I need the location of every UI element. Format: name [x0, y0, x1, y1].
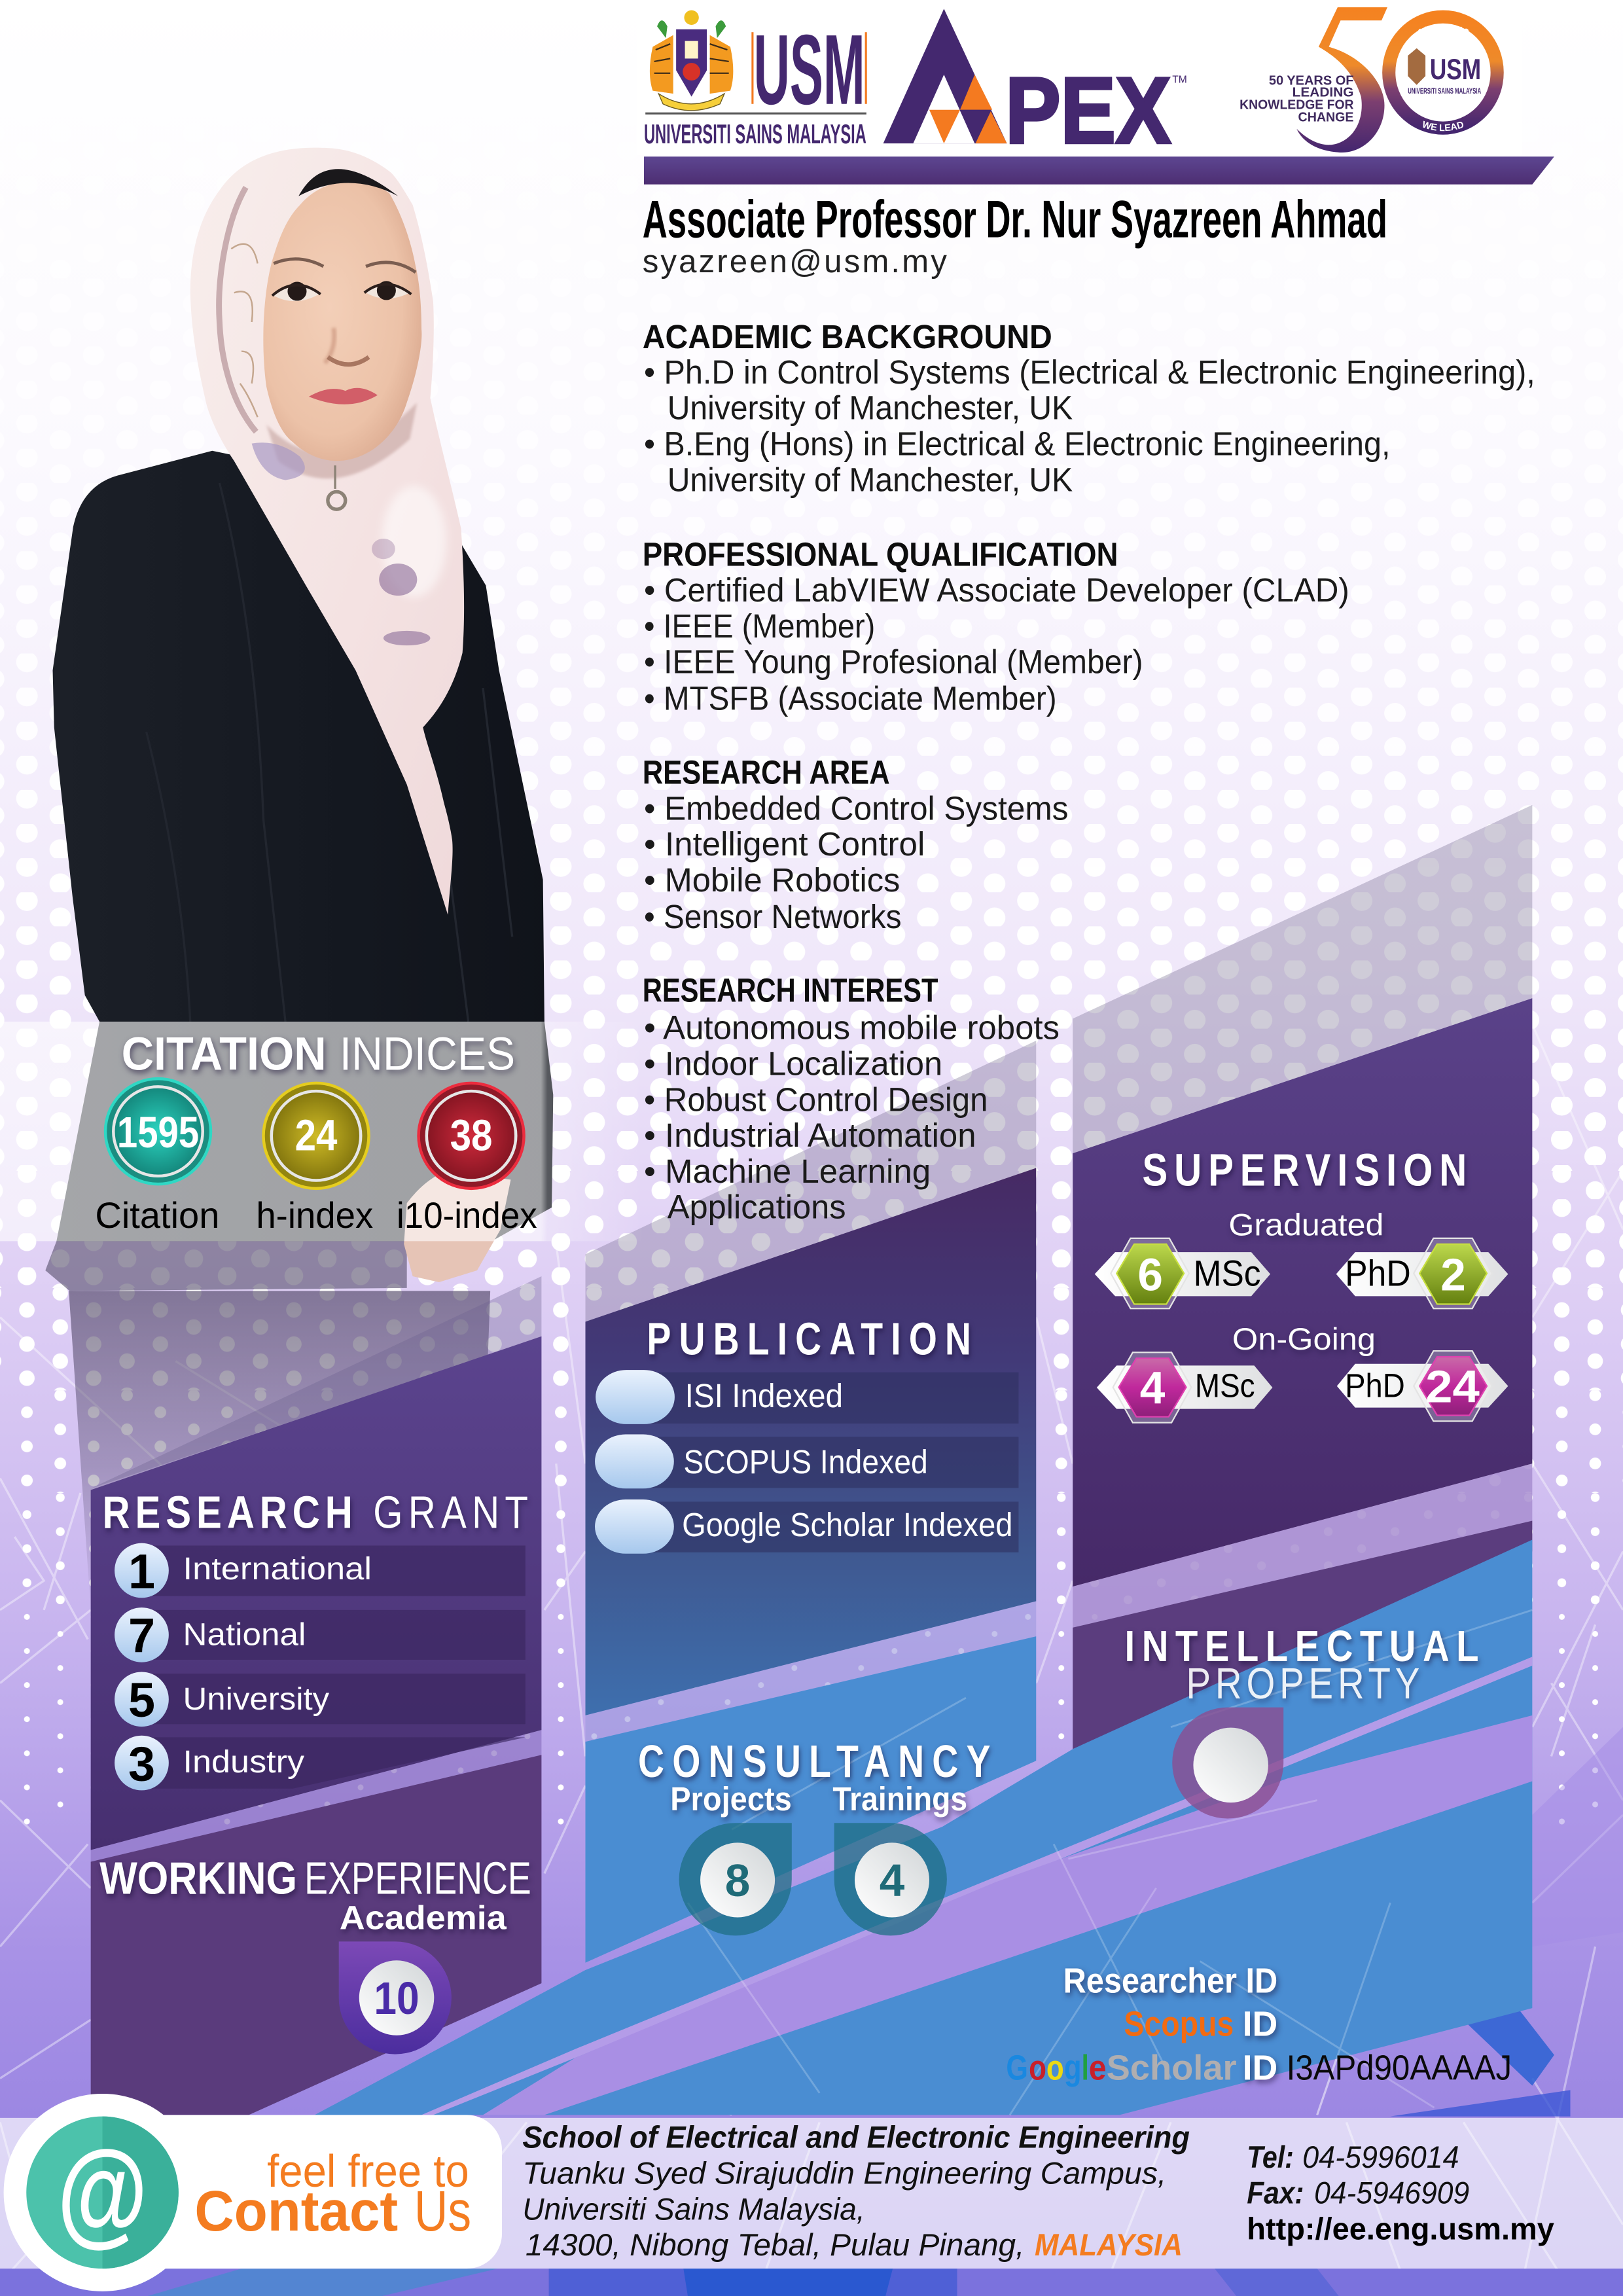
research interest: [643, 971, 1060, 1226]
row: international: 1: [128, 1544, 155, 1598]
research interest: • Indoor Localization: [644, 1045, 942, 1083]
row: national: [115, 1607, 306, 1663]
badge: on-going PhD: [1337, 1351, 1508, 1421]
scopus ID: Scopus: [1124, 2005, 1234, 2044]
USM wordmark: [751, 14, 867, 126]
row: SCOPUS: [595, 1435, 928, 1488]
academic background: [643, 317, 1535, 498]
eyes and brows: [272, 259, 416, 301]
hijab: [190, 148, 464, 915]
labels: h-index: [256, 1194, 373, 1236]
50 years logo: USM: [1430, 54, 1481, 86]
row: national: National: [183, 1617, 306, 1653]
research area: RESEARCH AREA: [643, 753, 890, 791]
address block: School of Electrical and Electronic Engineering: [522, 2120, 1190, 2155]
badge: graduated MSc: 6: [1137, 1249, 1163, 1300]
intellectual property content: [1125, 1623, 1479, 1819]
hijab flower sketch: [231, 244, 258, 417]
working experience content: [99, 1853, 531, 2054]
labels: [95, 1194, 537, 1236]
footer band: [0, 2118, 1623, 2269]
address block: Tuanku Syed Sirajuddin Engineering Campus,: [522, 2155, 1166, 2190]
at sign icon: [26, 2117, 179, 2269]
research grant content: [103, 1487, 528, 1791]
badge: trainings 4: 4: [880, 1855, 905, 1906]
labels: i10-index: [397, 1194, 537, 1236]
google scholar ID: l: [1082, 2049, 1089, 2088]
subheading: PROPERTY: [1186, 1660, 1419, 1708]
row: Google Scholar: Google Scholar Indexed: [682, 1505, 1012, 1543]
call to action: feel free to: [267, 2145, 469, 2197]
row: national: 7: [128, 1609, 155, 1663]
APEX logo: [883, 9, 1187, 163]
academic background: ACADEMIC BACKGROUND: [643, 317, 1052, 355]
heading: SUPERVISION: [1142, 1145, 1467, 1196]
trainings label: Trainings: [832, 1780, 967, 1818]
50 years logo: 50 YEARS OF: [1269, 74, 1354, 88]
supervision content: [1095, 1145, 1508, 1423]
heading: [103, 1487, 528, 1538]
row: international: [115, 1543, 372, 1598]
hand: [404, 1171, 510, 1282]
publication background: [585, 1168, 1036, 1715]
APEX logo: TM: [1172, 74, 1187, 85]
panel: supervision and IP backgrounds: [1073, 805, 1532, 1749]
academic background: • B.Eng (Hons) in Electrical & Electronic Engineering,: [644, 424, 1390, 462]
academic background: University of Manchester, UK: [668, 460, 1073, 498]
row: ISI: ISI Indexed: [685, 1376, 843, 1414]
academic background: University of Manchester, UK: [668, 389, 1073, 427]
professional qualification: • MTSFB (Associate Member): [644, 679, 1057, 717]
contact details: http://ee.eng.usm.my: [1247, 2211, 1554, 2246]
badge: on-going PhD: 24: [1425, 1361, 1480, 1412]
50 years logo: CHANGE: [1298, 111, 1354, 125]
row: industry: 3: [128, 1736, 155, 1791]
badge: i10-index: 38: [450, 1111, 492, 1160]
50 years logo: [1240, 7, 1504, 152]
row: industry: Industry: [183, 1744, 304, 1780]
research interest: RESEARCH INTEREST: [643, 971, 938, 1009]
google scholar ID: e: [1089, 2049, 1107, 2088]
chin shadow: [266, 403, 417, 478]
badge: graduated MSc: [1095, 1238, 1270, 1308]
professional qualification: • IEEE Young Profesional (Member): [644, 643, 1143, 681]
top logo area: [644, 7, 1504, 163]
panel: publication and consultancy backgrounds: [585, 1041, 1036, 1963]
at sign icon: @: [57, 2126, 148, 2257]
heading: INDICES: [340, 1028, 515, 1081]
row: SCOPUS: SCOPUS Indexed: [683, 1443, 928, 1480]
face: [263, 181, 421, 461]
google scholar ID: o: [1029, 2049, 1046, 2088]
google scholar ID: o: [1046, 2049, 1064, 2088]
consultancy content: [638, 1736, 990, 1935]
contact details: 04-5946909: [1314, 2176, 1469, 2210]
contact details: [1247, 2140, 1554, 2246]
50 years logo: KNOWLEDGE FOR: [1240, 98, 1354, 113]
address block: 14300, Nibong Tebal, Pulau Pinang,: [526, 2227, 1024, 2262]
panel: research grant and working experience: [91, 1276, 541, 2115]
heading: INTELLECTUAL: [1125, 1623, 1479, 1671]
research area: • Embedded Control Systems: [644, 789, 1068, 827]
row: university: 5: [128, 1673, 155, 1727]
under-cap: [298, 169, 398, 196]
badge: h-index: 24: [295, 1111, 337, 1160]
panel: citation indices: [0, 1022, 644, 1241]
email: syazreen@usm.my: [643, 243, 947, 279]
USM crest logo: [644, 10, 867, 149]
jacket detail lines: [147, 483, 512, 1022]
contact details: 04-5996014: [1302, 2140, 1459, 2174]
professional qualification: PROFESSIONAL QUALIFICATION: [643, 535, 1118, 573]
portrait photo: [45, 148, 553, 1610]
research interest: Applications: [668, 1188, 846, 1226]
badge: graduated MSc: MSc: [1194, 1253, 1261, 1294]
contact details: Fax:: [1247, 2176, 1304, 2210]
pendant: [328, 465, 346, 509]
badge: projects 8: 8: [725, 1855, 750, 1906]
badge: graduated PhD: 2: [1440, 1249, 1466, 1300]
working experience background: [91, 1755, 541, 2115]
google scholar ID: Scholar: [1107, 2049, 1237, 2088]
on-going label: On-Going: [1232, 1321, 1376, 1356]
heading: CITATION: [122, 1028, 327, 1081]
publication content: [595, 1314, 1018, 1554]
graduated label: Graduated: [1228, 1207, 1383, 1242]
research area: • Intelligent Control: [644, 825, 925, 863]
contact badge: [4, 2094, 502, 2291]
badge: trainings 4: [834, 1823, 947, 1935]
projects label: Projects: [670, 1780, 792, 1818]
researcher ID: Researcher ID: [1063, 1962, 1277, 2001]
professional qualification: • Certified LabVIEW Associate Developer (CLAD): [644, 571, 1349, 609]
page background: [0, 520, 1623, 2296]
lower jacket hem: [45, 1241, 407, 1291]
light strip: [1073, 1463, 1532, 1628]
50 years logo: UNIVERSITI SAINS MALAYSIA: [1408, 86, 1481, 96]
scarf highlight: [382, 486, 446, 597]
purple header band: [644, 156, 1554, 185]
address block: MALAYSIA: [1035, 2227, 1183, 2262]
row: university: [115, 1672, 329, 1727]
badge: citation: [105, 1079, 211, 1184]
research interest: • Industrial Automation: [644, 1116, 976, 1154]
blue diagonal bands: [315, 1540, 1532, 2115]
badge: i10-index: [419, 1083, 524, 1189]
50 years logo: LEADING: [1293, 86, 1354, 100]
badge: on-going MSc: [1097, 1352, 1272, 1423]
hijab fold: [219, 187, 256, 432]
google scholar ID: G: [1006, 2049, 1028, 2088]
nose: [325, 328, 369, 365]
row: industry: [115, 1736, 304, 1791]
badge: empty: [1172, 1708, 1283, 1819]
badge: 10 years: [339, 1941, 452, 2054]
call to action: Contact: [194, 2179, 398, 2243]
USM wordmark: USM: [754, 14, 865, 126]
contact details: Tel:: [1247, 2140, 1294, 2174]
badge: citation: 1595: [117, 1108, 199, 1157]
profile text: [643, 190, 1535, 1226]
call to action: Us: [414, 2179, 471, 2243]
row: Google Scholar: [595, 1499, 1012, 1554]
research interest: • Autonomous mobile robots: [644, 1009, 1060, 1047]
google scholar ID: g: [1064, 2049, 1082, 2088]
consultancy background: [585, 1636, 1036, 1963]
intellectual property background: [1073, 1520, 1532, 1749]
google scholar ID: I3APd90AAAAJ: [1287, 2049, 1512, 2088]
supervision background: [1073, 998, 1532, 1587]
row: university: University: [183, 1681, 329, 1717]
USM crest logo: UNIVERSITI SAINS MALAYSIA: [644, 119, 866, 149]
research interest: • Robust Control Design: [644, 1080, 988, 1118]
research area: [643, 753, 1068, 935]
heading: [99, 1853, 531, 1904]
badge: on-going MSc: 4: [1140, 1363, 1166, 1414]
badge: on-going MSc: MSc: [1195, 1366, 1255, 1404]
google scholar ID: [1006, 2049, 1512, 2088]
badge: projects 8: [679, 1823, 792, 1935]
row bars: [644, 1372, 1018, 1552]
50 years logo: 1969-2019: [1418, 25, 1469, 31]
row bars: [141, 1545, 526, 1789]
heading: EXPERIENCE: [304, 1853, 531, 1904]
badge: h-index: [264, 1083, 369, 1189]
heading: RESEARCH: [103, 1487, 353, 1538]
badge: 10 years: 10: [374, 1973, 419, 2024]
light strip: [585, 1601, 1036, 1742]
wide light wedge: [483, 1715, 1532, 2115]
labels: Citation: [95, 1194, 219, 1236]
heading: GRANT: [373, 1487, 528, 1538]
research grant background: [91, 1336, 541, 1850]
light strip: [91, 1730, 541, 1862]
badge: graduated PhD: PhD: [1345, 1253, 1411, 1294]
researcher IDs: [1006, 1962, 1512, 2088]
faded lower body: [69, 1291, 490, 1610]
professional qualification: [643, 535, 1349, 717]
scarf flowers: [252, 442, 430, 645]
APEX logo: PEX: [1005, 58, 1171, 163]
badge: graduated PhD: [1336, 1238, 1508, 1308]
research interest: • Machine Learning: [644, 1152, 931, 1190]
subheading: Academia: [340, 1898, 507, 1936]
heading: WORKING: [99, 1853, 297, 1904]
lips: [309, 388, 378, 404]
scopus ID: ID: [1243, 2005, 1277, 2044]
heading: CONSULTANCY: [638, 1736, 990, 1787]
jacket: [53, 451, 553, 1241]
google scholar ID: ID: [1243, 2049, 1277, 2088]
research area: • Sensor Networks: [644, 897, 902, 935]
academic background: • Ph.D in Control Systems (Electrical & Electronic Engineering),: [644, 353, 1535, 391]
thin light stripe: [421, 1657, 1532, 2115]
address block: Universiti Sains Malaysia,: [522, 2191, 865, 2226]
heading: PUBLICATION: [647, 1314, 971, 1365]
address block: [522, 2120, 1190, 2262]
50 years logo: WE LEAD: [1423, 120, 1463, 131]
badge: on-going PhD: PhD: [1345, 1366, 1405, 1404]
row: ISI: [596, 1370, 843, 1424]
row: international: International: [183, 1551, 372, 1587]
dotted strip above research grant: [91, 1276, 541, 1488]
call to action: [194, 2145, 471, 2243]
dotted strip above publication: [585, 1041, 1036, 1321]
research area: • Mobile Robotics: [644, 861, 900, 899]
heading: [122, 1028, 515, 1081]
professional qualification: • IEEE (Member): [644, 607, 875, 645]
dotted strip above supervision: [1073, 805, 1532, 1153]
